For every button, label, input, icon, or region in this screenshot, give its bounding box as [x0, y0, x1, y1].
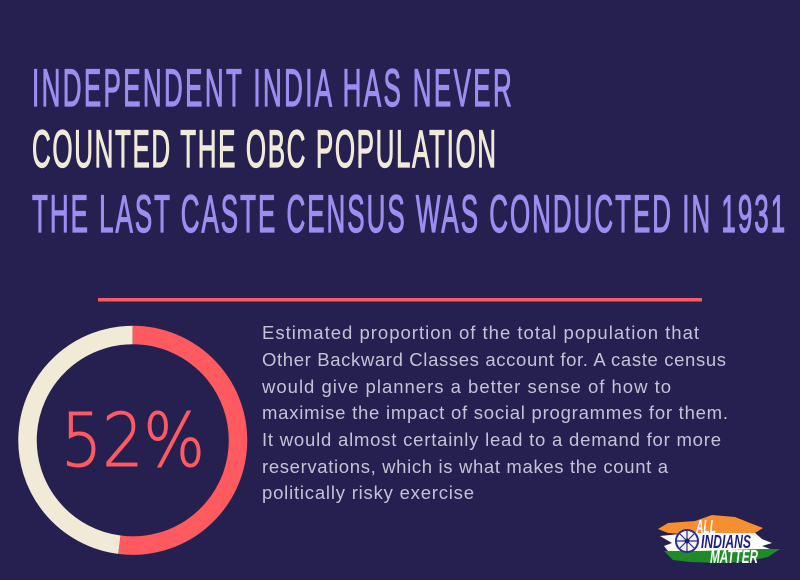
- donut value: 52%: [61, 398, 205, 484]
- title line 1: INDEPENDENT INDIA HAS NEVER: [32, 58, 512, 117]
- title: [32, 58, 785, 243]
- logo green brush stroke: [664, 549, 780, 563]
- donut 52% segment: [119, 335, 238, 546]
- logo wordmark: [695, 517, 758, 567]
- donut chart: 52%: [27, 335, 238, 546]
- divider: [98, 298, 702, 302]
- description text: reservations, which is what makes the count a: [262, 456, 669, 477]
- description text: [261, 322, 728, 503]
- logo wordmark: MATTER: [710, 547, 758, 567]
- logo: All Indians Matter: [658, 515, 780, 567]
- donut remainder segment: [27, 335, 133, 545]
- logo chakra: [676, 530, 698, 552]
- description text: Other Backward Classes account for. A caste census: [262, 349, 726, 370]
- title line 3: THE LAST CASTE CENSUS WAS CONDUCTED IN 1931: [32, 184, 785, 243]
- description text: maximise the impact of social programmes for them.: [262, 402, 728, 423]
- title line 2: COUNTED THE OBC POPULATION: [32, 119, 496, 178]
- description text: would give planners a better sense of how to: [261, 376, 671, 397]
- logo white brush stroke: [660, 533, 772, 552]
- description text: Estimated proportion of the total population that: [262, 322, 699, 343]
- description text: politically risky exercise: [262, 482, 474, 503]
- description text: It would almost certainly lead to a demand for more: [262, 429, 721, 450]
- logo saffron brush stroke: [658, 515, 763, 535]
- logo wordmark: ALL: [695, 517, 716, 537]
- logo wordmark: INDIANS: [701, 532, 751, 552]
